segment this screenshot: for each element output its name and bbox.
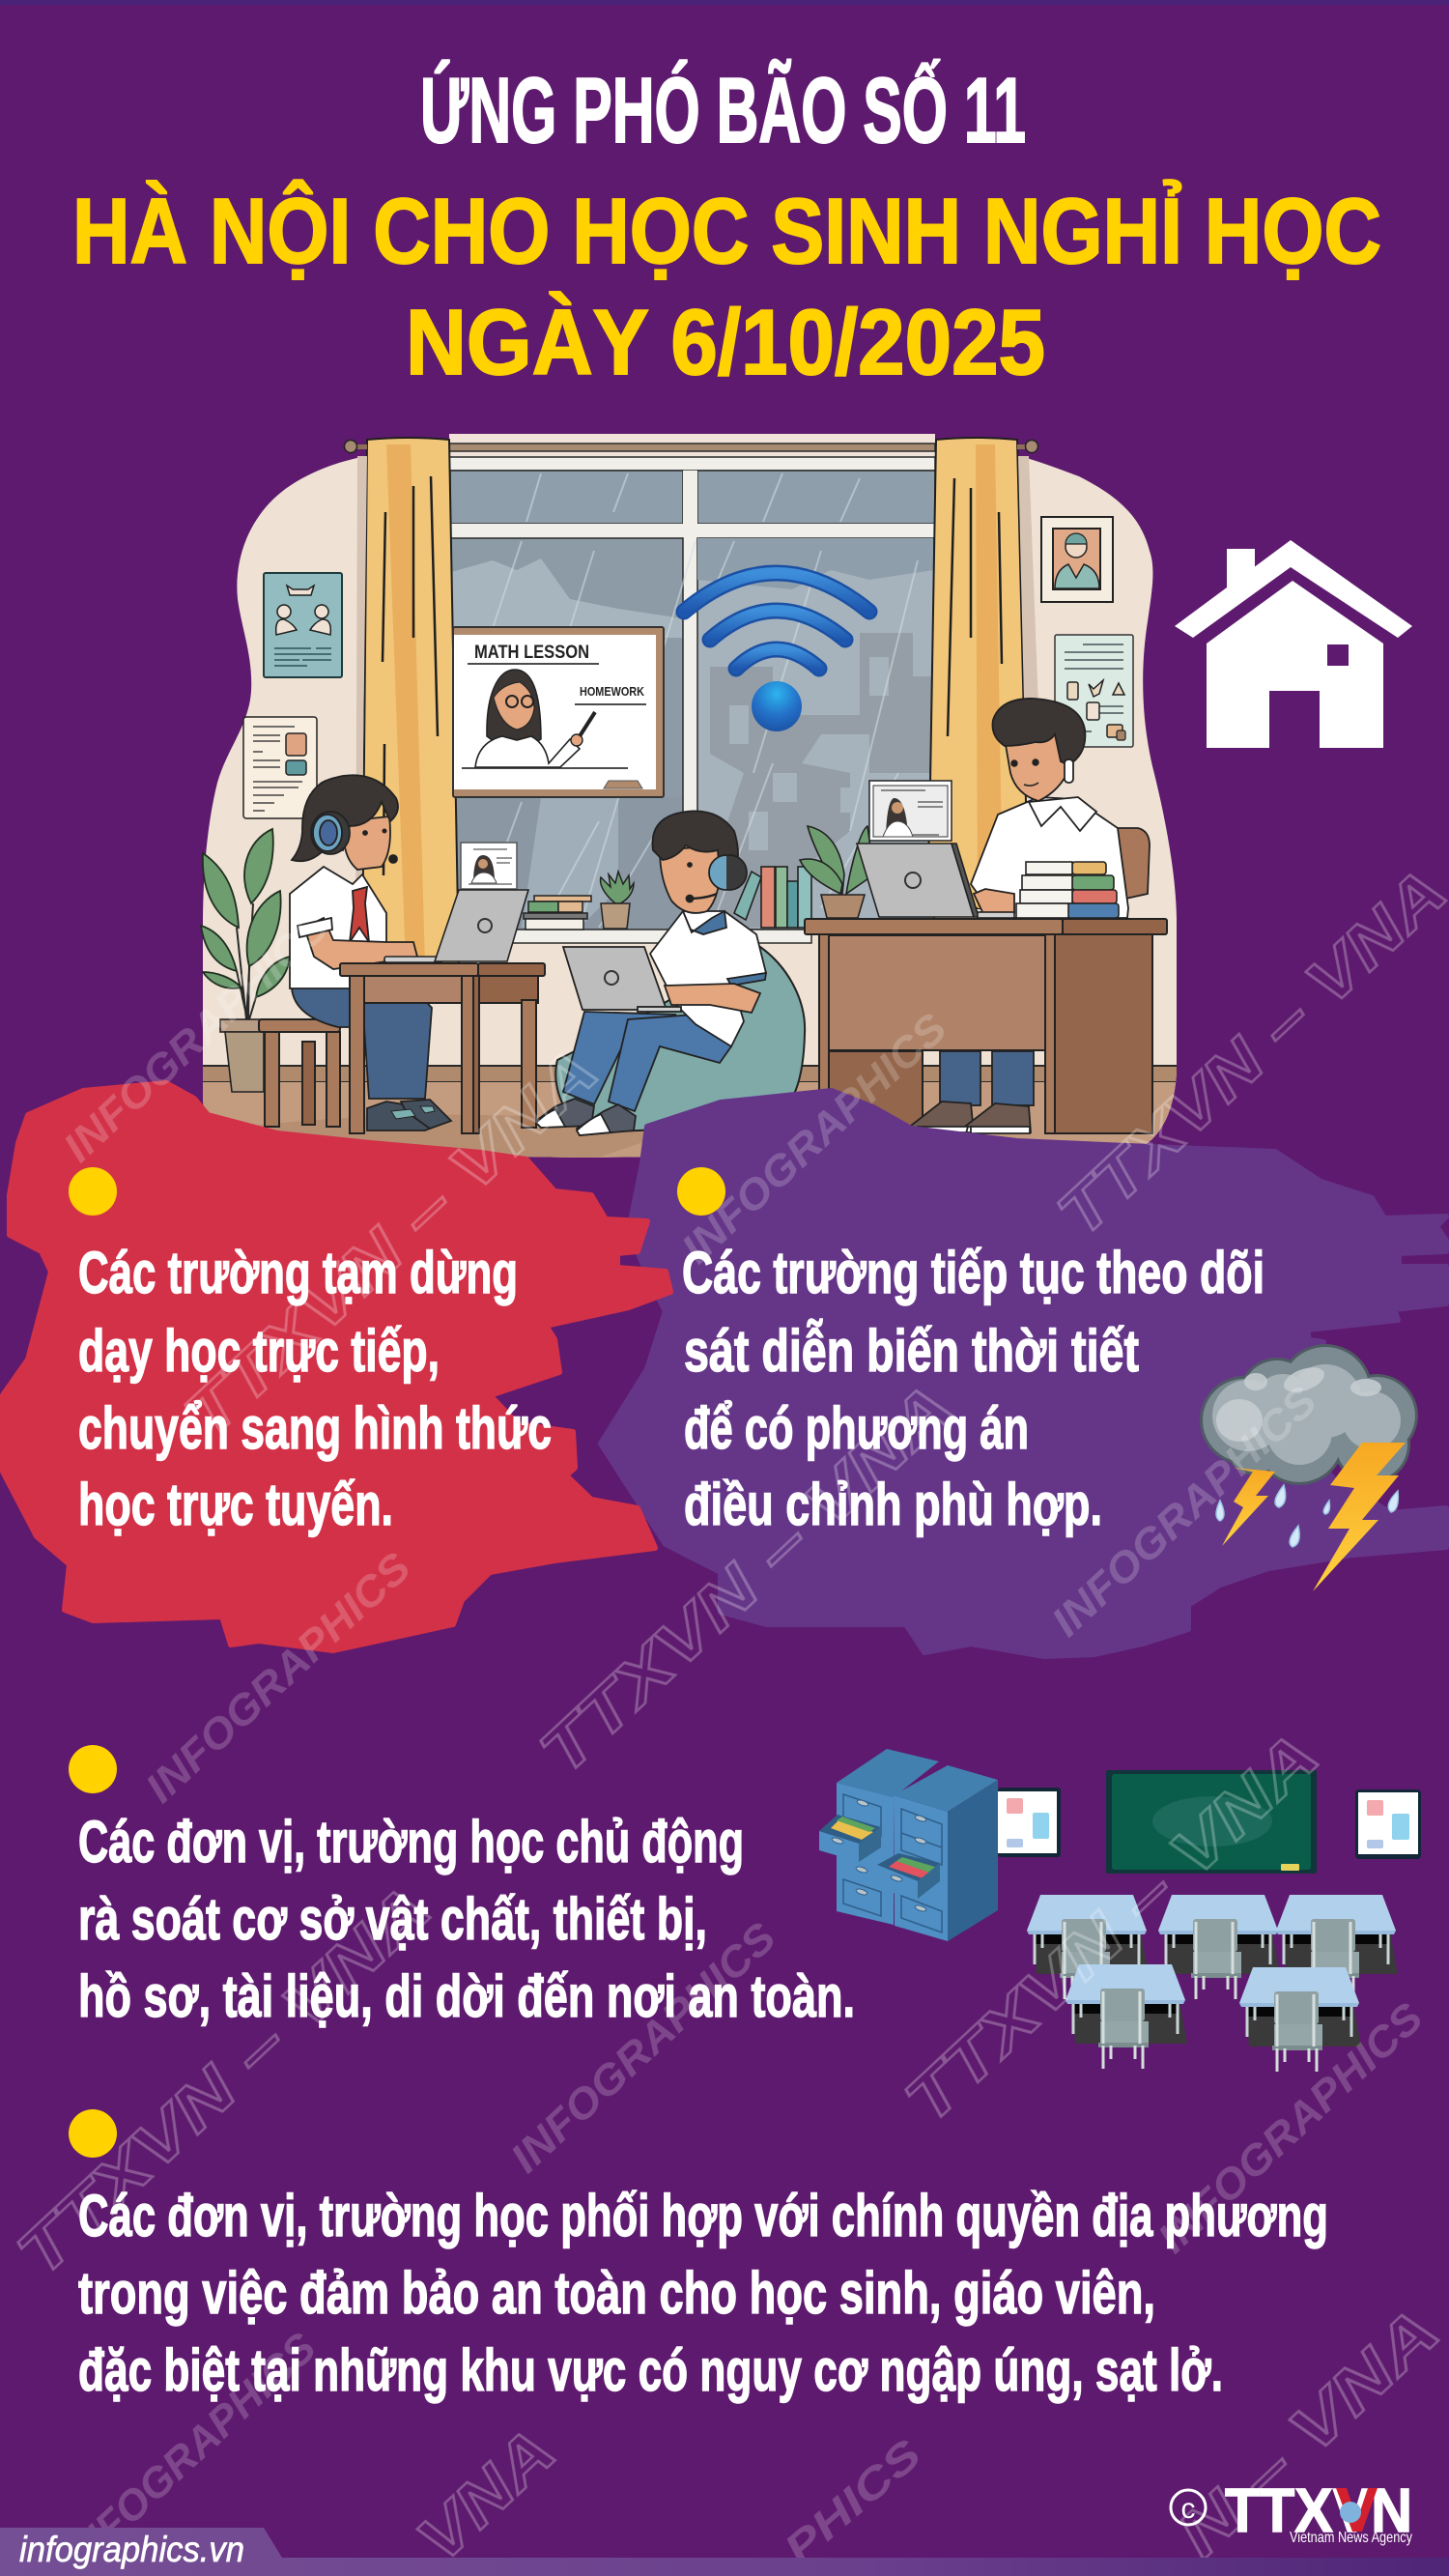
teacher legs and shoes [911, 1051, 1034, 1133]
text: purple panel: điều chỉnh phù hợp. [684, 1472, 1102, 1537]
logo: TTXVN: Vietnam News Agency [1290, 2530, 1412, 2546]
text: red panel: chuyển sang hình thức [78, 1395, 552, 1461]
girl arm [304, 918, 417, 969]
watermarks: NFOGRAPHICS [63, 2324, 326, 2572]
watermarks: PHICS [775, 2430, 930, 2574]
watermarks: TTXVN – VNA [170, 1034, 611, 1451]
face [1005, 734, 1069, 801]
laptop on desk [857, 844, 1014, 918]
icon: wall note right [1355, 1789, 1421, 1859]
book stack on desk [1016, 862, 1119, 918]
boy face [660, 845, 721, 913]
logo: TTXVN: TTXVN [1225, 2476, 1412, 2545]
poster: health note [1055, 635, 1133, 747]
watermarks: INFOGRAPHICS [1042, 1377, 1325, 1646]
watermarks: INFOGRAPHICS [501, 1913, 784, 2182]
whiteboard: math lesson: MATH LESSON [474, 643, 589, 663]
title [72, 58, 1381, 394]
icon: filing cabinets [819, 1749, 998, 1941]
plant left with pot [201, 829, 290, 1092]
drawer two [877, 1853, 940, 1881]
text: red panel [78, 1240, 552, 1537]
icon: wall note left [998, 1788, 1061, 1857]
boy shirt [650, 911, 766, 1046]
watermarks [3, 854, 1449, 2575]
girl tie [350, 887, 369, 942]
hair [993, 699, 1085, 765]
blob: red panel [3, 1083, 670, 1650]
girl face [344, 816, 390, 870]
bean bag [555, 947, 805, 1132]
plant on desk [800, 826, 874, 918]
curtain left [344, 438, 459, 966]
text: red panel: học trực tuyến. [78, 1472, 393, 1537]
boy arm [665, 984, 760, 1013]
whiteboard: math lesson [453, 627, 664, 797]
teacher man [971, 699, 1150, 918]
title: NGÀY 6/10/2025 [406, 291, 1045, 394]
stool [259, 1019, 340, 1127]
watermarks: INFOGRAPHICS [54, 902, 337, 1171]
text: red panel: dạy học trực tiếp, [78, 1318, 440, 1384]
boy hair [653, 811, 738, 874]
watermarks: TTXVN – VNA [3, 1872, 443, 2289]
hands [974, 889, 1014, 918]
watermarks: TTXVN – VNA [891, 1719, 1331, 2136]
desk top [805, 919, 1167, 934]
blob: purple panel [601, 1091, 1446, 1656]
text: red panel: Các trường tạm dừng [78, 1240, 518, 1305]
chair [1114, 828, 1150, 899]
whiteboard: math lesson: HOMEWORK [580, 684, 644, 699]
icon: storm cloud [1200, 1344, 1418, 1591]
footer site name: infographics.vn [19, 2530, 244, 2569]
small tablet on sill [461, 843, 517, 889]
text: section three: rà soát cơ sở vật chất, thiết bị, [78, 1886, 707, 1952]
boy laptop [563, 947, 667, 1010]
text: section three: hồ sơ, tài liệu, di dời đến nơi an toàn. [78, 1963, 855, 2029]
text: section three: Các đơn vị, trường học chủ động [78, 1809, 744, 1875]
curtain right [927, 438, 1041, 908]
girl pants and shoes [292, 983, 451, 1131]
tablet on desk [869, 781, 952, 841]
drawer one [819, 1815, 881, 1844]
watermarks: TTXVN – VNA [526, 1370, 966, 1788]
books upright [734, 867, 811, 928]
icon: house [1175, 540, 1412, 748]
watermarks: N – VNA [1163, 2294, 1449, 2570]
window [449, 434, 935, 943]
text: section three [78, 1809, 855, 2029]
desk right [819, 934, 1152, 1148]
bullet: section three [69, 1745, 117, 1793]
big lightning [1313, 1443, 1406, 1591]
poster: teal team chart [264, 573, 342, 677]
poster: paper note [243, 717, 317, 818]
girl shirt [290, 867, 386, 988]
student boy [536, 811, 766, 1135]
text: purple panel [682, 1240, 1264, 1537]
text: purple panel: để có phương án [684, 1395, 1029, 1461]
student girl [290, 775, 451, 1131]
watermarks: INFOGRAPHICS [136, 1543, 419, 1812]
watermarks: INFOGRAPHICS [672, 1004, 955, 1273]
bullet: purple panel [677, 1167, 725, 1216]
watermarks: VNA [403, 2415, 568, 2575]
wifi icon [684, 573, 869, 731]
laptop left [384, 890, 528, 962]
title: ỨNG PHÓ BÃO SỐ 11 [420, 58, 1026, 162]
girl hair [292, 775, 398, 861]
text: purple panel: sát diễn biến thời tiết [684, 1318, 1139, 1384]
girl headphone [311, 812, 350, 854]
table left [340, 963, 545, 1133]
boy shoes [536, 1099, 594, 1128]
bullet: section four [69, 2109, 117, 2158]
poster: portrait frame [1041, 517, 1113, 602]
icon: classroom desks [1027, 1895, 1398, 2072]
logo: TTXVN: c [1180, 2493, 1196, 2525]
boy legs [563, 1012, 676, 1104]
footer strip [0, 2528, 1449, 2576]
text: section four [78, 2183, 1328, 2403]
illustration: online learning room [193, 434, 1188, 1164]
rain drops [1216, 1485, 1398, 1547]
small lightning [1222, 1468, 1275, 1546]
boy headphone [712, 855, 747, 890]
shirt [971, 797, 1128, 918]
watermarks: INFOGRAPHICS [1149, 1993, 1432, 2262]
books and small plant on sill [524, 872, 634, 930]
watermarks: TTXVN – VNA [1043, 854, 1449, 1249]
icon: blackboard [1106, 1770, 1317, 1874]
bullet: red panel [69, 1167, 117, 1216]
room wall and floor [193, 449, 1188, 1164]
